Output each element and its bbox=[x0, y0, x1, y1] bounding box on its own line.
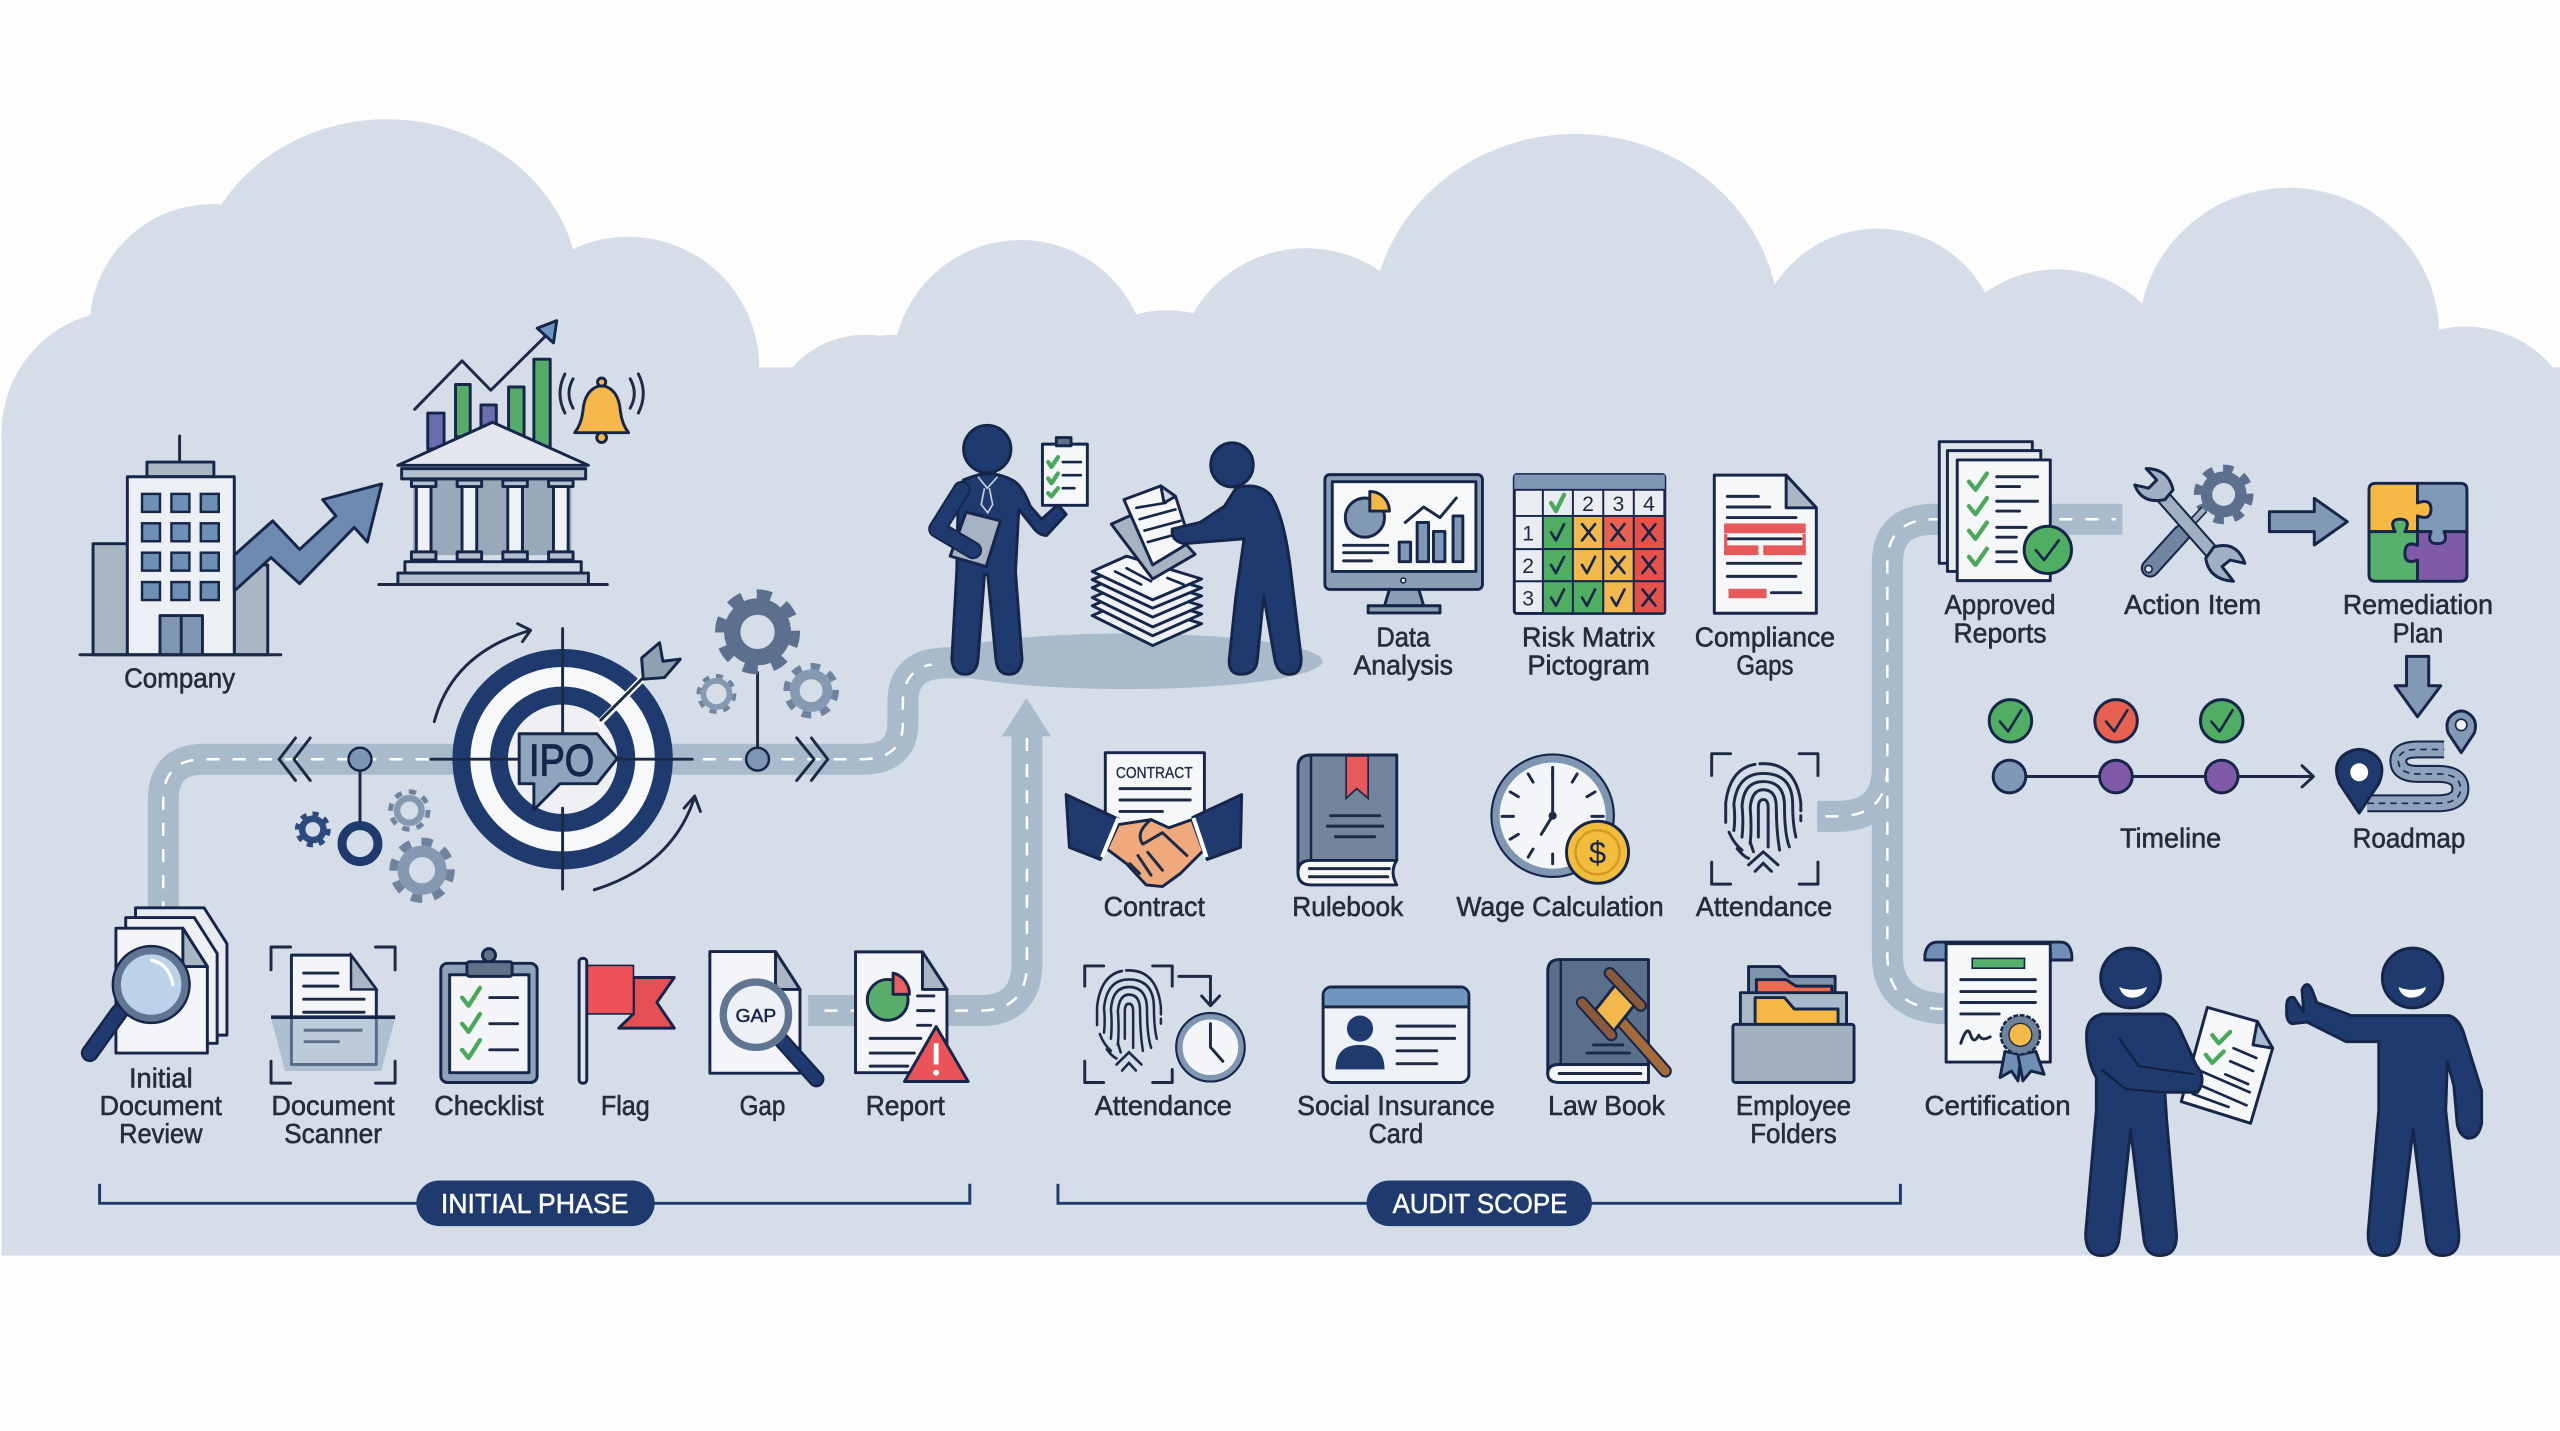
icon: compliance gaps document bbox=[1714, 475, 1816, 613]
label: social insurance card: Card bbox=[1369, 1118, 1423, 1149]
icon: company building bbox=[80, 436, 281, 655]
label: compliance gaps bbox=[1695, 622, 1835, 680]
label: approved reports: Approved bbox=[1944, 589, 2056, 620]
chevrons: left bbox=[279, 738, 310, 780]
label: initial document review: Review bbox=[119, 1118, 203, 1149]
label: checklist: Checklist bbox=[434, 1090, 544, 1121]
label: remediation plan: Plan bbox=[2393, 617, 2443, 648]
label: wage calculation: Wage Calculation bbox=[1456, 891, 1664, 922]
label: contract: Contract bbox=[1104, 891, 1205, 922]
label: attendance bottom: Attendance bbox=[1095, 1090, 1232, 1121]
road: audit scope to reports and certification bbox=[1817, 519, 2122, 1009]
icon: wage calculation clock bbox=[1491, 754, 1629, 883]
figure: auditor collecting papers bbox=[1172, 443, 1301, 674]
label: employee folders: Folders bbox=[1750, 1118, 1837, 1149]
icon: alert bell bbox=[560, 374, 643, 442]
section bracket: initial phase bbox=[100, 1180, 970, 1226]
label: data analysis: Analysis bbox=[1353, 649, 1453, 680]
arrow: action to remediation bbox=[2269, 498, 2347, 545]
figure: person holding certified document bbox=[2086, 948, 2273, 1256]
icon: paper stack bbox=[1092, 486, 1202, 646]
icon: gap document: GAP bbox=[736, 1005, 776, 1026]
icon: contract handshake: CONTRACT bbox=[1116, 765, 1193, 782]
icon: gears upper right bbox=[698, 594, 836, 771]
label: approved reports bbox=[1944, 589, 2056, 648]
IPO sign: IPO bbox=[529, 737, 594, 786]
label: social insurance card: Social Insurance bbox=[1297, 1090, 1495, 1121]
icon: checklist bbox=[441, 949, 537, 1082]
icon: contract handshake bbox=[1066, 753, 1242, 887]
label: timeline: Timeline bbox=[2120, 822, 2221, 853]
icon: roadmap bbox=[2336, 711, 2475, 813]
label: document scanner bbox=[271, 1090, 395, 1149]
icon: law book and gavel bbox=[1548, 960, 1665, 1082]
icon: wage calculation clock: $ bbox=[1589, 836, 1606, 871]
icon: attendance fingerprint bbox=[1712, 754, 1818, 884]
clipboard bbox=[1042, 438, 1087, 505]
label: rulebook: Rulebook bbox=[1292, 891, 1403, 922]
section bracket: audit scope: AUDIT SCOPE bbox=[1393, 1188, 1567, 1219]
section bracket: audit scope bbox=[1058, 1180, 1900, 1226]
folder bbox=[950, 512, 1000, 567]
icon: document scanner bbox=[271, 947, 395, 1083]
label: risk matrix pictogram: Risk Matrix bbox=[1522, 622, 1655, 653]
chevrons: right bbox=[797, 738, 828, 780]
icon: gears lower left bbox=[297, 748, 451, 899]
chart: rising bars and trend line bbox=[415, 321, 557, 449]
label: report: Report bbox=[866, 1090, 945, 1121]
figure: person thumbs up bbox=[2287, 948, 2482, 1256]
icon: initial document review bbox=[90, 908, 227, 1053]
dart bbox=[598, 643, 680, 725]
icon: IPO target bbox=[431, 624, 700, 890]
section bracket: initial phase: INITIAL PHASE bbox=[441, 1188, 629, 1219]
label: document scanner: Document bbox=[271, 1090, 395, 1121]
IPO sign bbox=[519, 734, 617, 810]
label: remediation plan: Remediation bbox=[2343, 589, 2493, 620]
label: compliance gaps: Compliance bbox=[1695, 622, 1835, 653]
label: remediation plan bbox=[2343, 589, 2493, 648]
chart: risk matrix: 2 bbox=[1582, 493, 1594, 516]
icon: stock exchange building bbox=[379, 422, 607, 585]
icon: employee folders bbox=[1733, 967, 1854, 1082]
label: company: Company bbox=[124, 662, 235, 693]
icon: flag bbox=[579, 958, 674, 1083]
cloud background bbox=[2, 119, 2560, 1256]
label: social insurance card bbox=[1297, 1090, 1495, 1149]
label: employee folders: Employee bbox=[1736, 1090, 1851, 1121]
label: gap: Gap bbox=[740, 1090, 785, 1121]
label: certification: Certification bbox=[1924, 1090, 2071, 1121]
chart: timeline bbox=[1989, 700, 2313, 793]
road: report to audit arrow bbox=[808, 698, 1051, 1011]
label: compliance gaps: Gaps bbox=[1736, 649, 1793, 680]
icon: certification bbox=[1925, 942, 2072, 1081]
chart: risk matrix: 4 bbox=[1643, 493, 1655, 516]
label: initial document review bbox=[100, 1062, 222, 1149]
icon: attendance fingerprint and clock bbox=[1085, 966, 1245, 1082]
audit platform bbox=[931, 634, 1322, 689]
arrow: company growth bbox=[234, 484, 382, 591]
label: law book: Law Book bbox=[1548, 1090, 1665, 1121]
label: roadmap: Roadmap bbox=[2353, 822, 2465, 853]
chart: risk matrix bbox=[1514, 475, 1665, 613]
label: risk matrix pictogram bbox=[1522, 622, 1655, 680]
document bbox=[2181, 1007, 2273, 1123]
icon: data analysis monitor bbox=[1325, 475, 1482, 613]
chart: risk matrix: 3 bbox=[1613, 493, 1624, 516]
label: initial document review: Initial bbox=[129, 1062, 193, 1093]
figure: auditor with clipboard bbox=[937, 425, 1087, 674]
icon: report with warning bbox=[856, 952, 968, 1082]
icon: social insurance card bbox=[1323, 987, 1469, 1082]
label: attendance top: Attendance bbox=[1696, 891, 1832, 922]
label: flag: Flag bbox=[601, 1090, 650, 1121]
label: employee folders bbox=[1736, 1090, 1851, 1149]
icon: remediation puzzle bbox=[2369, 483, 2467, 581]
icon: rulebook bbox=[1298, 755, 1397, 885]
label: approved reports: Reports bbox=[1953, 617, 2047, 648]
chart: risk matrix: 2 bbox=[1522, 555, 1534, 578]
arm over folder bbox=[937, 490, 973, 550]
icon: action item tools bbox=[2135, 468, 2250, 581]
label: risk matrix pictogram: Pictogram bbox=[1527, 649, 1650, 680]
label: document scanner: Scanner bbox=[284, 1118, 382, 1149]
chart: risk matrix: 1 bbox=[1522, 522, 1534, 545]
label: initial document review: Document bbox=[100, 1090, 222, 1121]
icon: gap document bbox=[710, 952, 816, 1079]
label: data analysis bbox=[1353, 622, 1453, 680]
icon: approved reports bbox=[1939, 442, 2072, 581]
label: action item: Action Item bbox=[2124, 589, 2261, 620]
road: initial path to audit platform bbox=[163, 663, 980, 922]
arrow: remediation to roadmap bbox=[2395, 656, 2441, 717]
label: data analysis: Data bbox=[1376, 622, 1431, 653]
chart: risk matrix: 3 bbox=[1522, 588, 1534, 611]
